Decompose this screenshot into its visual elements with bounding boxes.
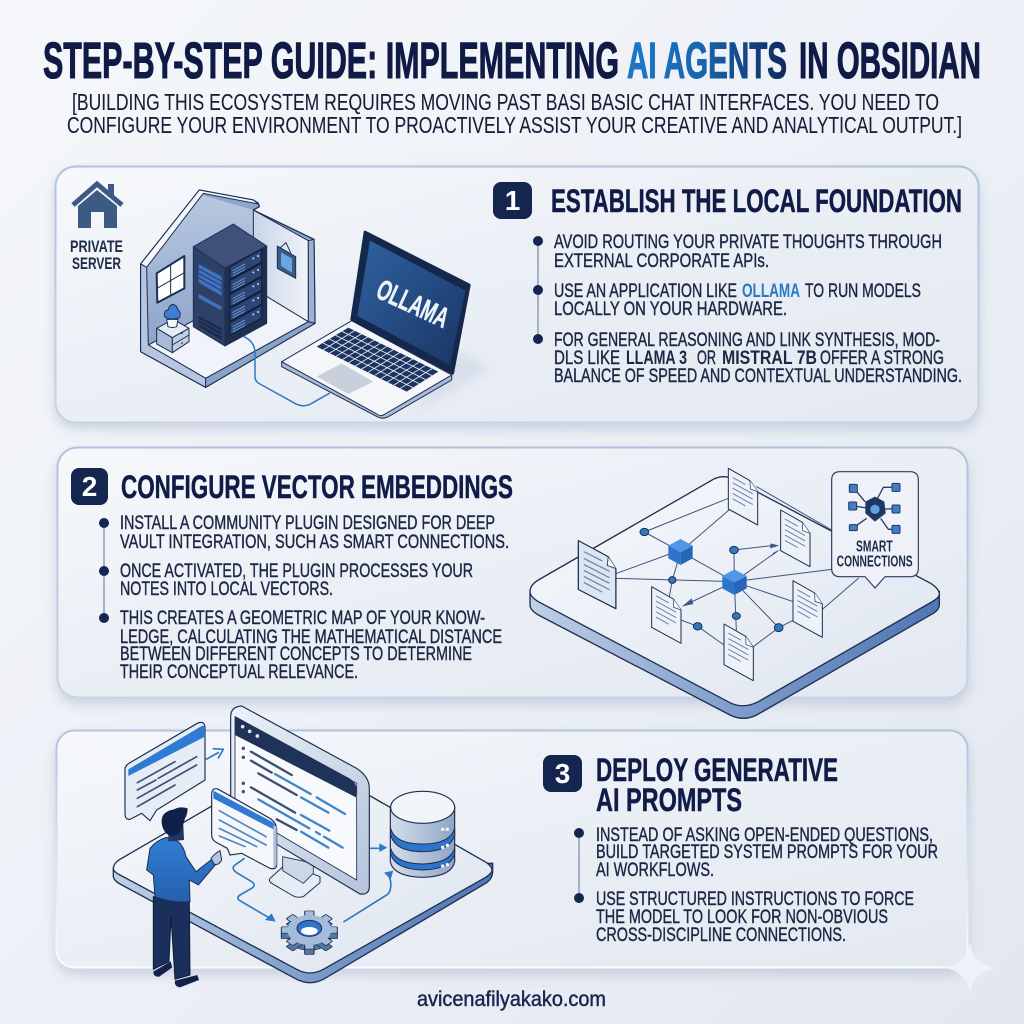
window [157, 256, 184, 303]
squiggle arrow to gear [233, 859, 276, 922]
monitor [231, 706, 369, 897]
document [728, 468, 758, 525]
bullet list: step 1: OR [697, 348, 716, 369]
bullet list: step 3: AI WORKFLOWS. [596, 860, 714, 881]
side table with plant [157, 304, 189, 353]
icon: private server house [73, 184, 122, 228]
bullet list: step 3: THE MODEL TO LOOK FOR NON-OBVIOUS [596, 907, 888, 928]
step number badge 1: 1 [505, 185, 520, 216]
bullet list: step 2: BETWEEN DIFFERENT CONCEPTS TO DETERMINE [120, 644, 472, 665]
heading: step 3: AI PROMPTS [596, 782, 742, 818]
bullet list: step 2: VAULT INTEGRATION, SUCH AS SMART CONNECTIONS. [120, 532, 509, 553]
icon label: private server [70, 237, 123, 273]
panel: step 2 [58, 448, 968, 718]
bullet list: step 2: INSTALL A COMMUNITY PLUGIN DESIGNED FOR DEEP [120, 513, 495, 534]
subtitle [67, 89, 962, 138]
panel: step 3 [56, 706, 968, 987]
bullet list: step 1 [533, 232, 962, 387]
footer url: avicenafilyakako.com [417, 988, 606, 1011]
wall picture [277, 243, 296, 278]
step number badge 3: 3 [555, 758, 570, 789]
bullet list: step 3: CROSS-DISCIPLINE CONNECTIONS. [596, 925, 846, 946]
panel: step 1 [56, 166, 978, 422]
person [147, 807, 222, 987]
laptop [282, 232, 490, 418]
bullet list: step 1: LLAMA 3 [626, 348, 687, 369]
decorative sparkle [944, 942, 996, 994]
title: AI AGENTS [627, 32, 787, 89]
bullet list: step 3 [574, 825, 938, 946]
callout: smart connections [832, 472, 918, 588]
cube node [722, 569, 747, 595]
cube node [668, 539, 693, 565]
bullet list: step 2: LEDGE, CALCULATING THE MATHEMATICAL DISTANCE [120, 627, 502, 648]
icon label: private server: PRIVATE [70, 237, 123, 256]
callout: left prompt window [125, 722, 205, 821]
callout: smart connections: SMART [856, 539, 893, 556]
bullet list: step 2: NOTES INTO LOCAL VECTORS. [120, 579, 333, 600]
bullet list: step 2: THEIR CONCEPTUAL RELEVANCE. [120, 662, 358, 683]
callout: smart connections: CONNECTIONS [837, 554, 913, 571]
arrow [206, 749, 223, 759]
illustration: home server room [141, 190, 490, 418]
callout: center prompt window [212, 789, 277, 869]
illustration: vector knowledge graph on platform [530, 468, 939, 718]
screen label: OLLAMA: OLLAMA [371, 274, 454, 335]
bullet list: step 1: EXTERNAL CORPORATE APIs. [554, 251, 769, 272]
bullet list: step 1: OFFER A STRONG [820, 348, 944, 369]
icon label: private server: SERVER [72, 254, 121, 273]
graph nodes [640, 528, 783, 632]
bullet list: step 1: TO RUN MODELS [805, 281, 921, 302]
title: STEP-BY-STEP GUIDE: IMPLEMENTING [43, 32, 619, 89]
network cable [244, 337, 329, 406]
bullet list: step 3: USE STRUCTURED INSTRUCTIONS TO FORCE [596, 889, 914, 910]
document [652, 587, 681, 643]
step number badge 3 [543, 755, 582, 792]
server rack [193, 224, 267, 346]
heading: step 3: DEPLOY GENERATIVE [596, 752, 838, 788]
arrow monitor to database [371, 843, 387, 852]
document [724, 624, 753, 681]
illustration: prompt workflow [113, 706, 493, 987]
heading: step 2: CONFIGURE VECTOR EMBEDDINGS [121, 469, 513, 505]
bullet list: step 1: DLS LIKE [554, 348, 620, 369]
bullet list: step 2: THIS CREATES A GEOMETRIC MAP OF YOUR KNOW- [120, 608, 485, 629]
bullet list: step 1: USE AN APPLICATION LIKE [554, 281, 737, 302]
data cylinder [390, 791, 455, 877]
bullet list: step 1: MISTRAL 7B [722, 348, 817, 369]
heading: step 3 [596, 752, 838, 818]
graph edges [617, 487, 858, 647]
bullet list: step 2 [99, 513, 509, 683]
gear icon [281, 911, 337, 954]
bullet list: step 1: OLLAMA [742, 281, 800, 302]
step number badge 1 [493, 182, 532, 219]
step number badge 2: 2 [82, 471, 97, 502]
bullet list: step 2: ONCE ACTIVATED, THE PLUGIN PROCESSES YOUR [120, 561, 473, 582]
document [781, 510, 810, 567]
arrow gear to database [344, 871, 393, 922]
document [793, 581, 822, 637]
step number badge 2 [71, 468, 108, 505]
platform [113, 755, 493, 983]
document [578, 541, 616, 609]
bullet list: step 1: LOCALLY ON YOUR HARDWARE. [554, 299, 787, 320]
